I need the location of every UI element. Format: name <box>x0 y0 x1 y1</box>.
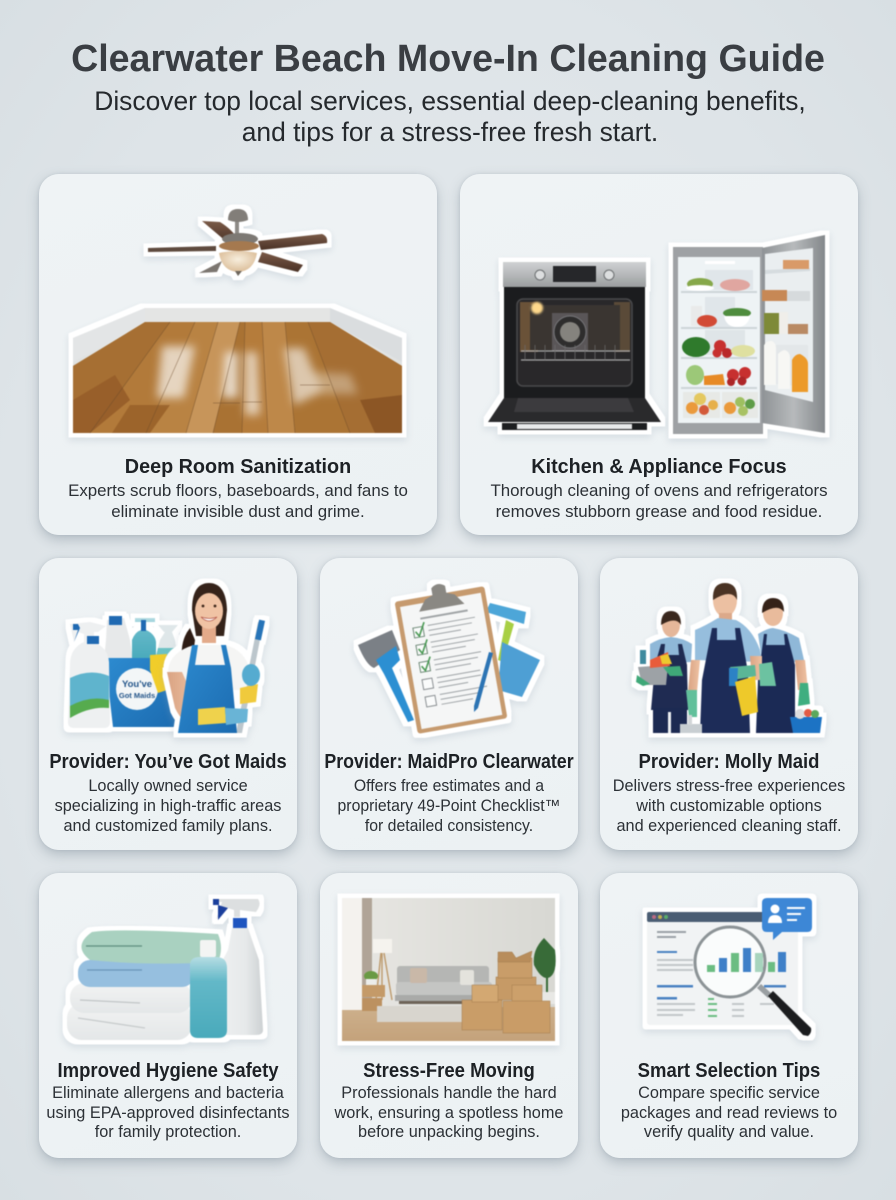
text block <box>68 481 408 521</box>
heading: Provider: Molly Maid <box>639 751 819 773</box>
sub-element: left cleaner <box>636 611 692 733</box>
sub-element: roller and sponge <box>486 603 540 697</box>
text block: proprietary 49-Point Checklist™ <box>338 797 560 815</box>
sub-element: bucket label: You've <box>122 679 152 690</box>
text block: Experts scrub floors, baseboards, and fans to <box>68 481 408 500</box>
sub-element: stacked boxes <box>462 951 550 1033</box>
icon: living room with moving boxes <box>342 898 556 1041</box>
icon: cleaning supplies bucket: Got Maids <box>119 691 155 700</box>
heading: Improved Hygiene Safety <box>57 1060 279 1082</box>
sub-element: right cleaner <box>756 598 822 733</box>
text block: and experienced cleaning staff. <box>616 817 842 835</box>
heading: Provider: You’ve Got Maids <box>49 751 287 773</box>
subtitle: Discover top local services, essential deep-cleaning benefits, <box>94 86 806 116</box>
text block: removes stubborn grease and food residue. <box>496 502 822 521</box>
text block: work, ensuring a spotless home <box>335 1104 563 1122</box>
sub-element: fridge food <box>682 278 758 418</box>
heading: Smart Selection Tips <box>638 1060 820 1082</box>
text block: verify quality and value. <box>644 1123 814 1141</box>
text block: Locally owned service <box>88 777 248 795</box>
text block: for detailed consistency. <box>365 817 533 835</box>
icon: open refrigerator <box>673 235 825 434</box>
icon: towels and bottles <box>67 899 263 1040</box>
text block <box>46 1084 290 1141</box>
text block: with customizable options <box>636 797 822 815</box>
title: Clearwater Beach Move-In Cleaning Guide <box>71 37 825 79</box>
text block <box>613 777 845 835</box>
icon: ceiling fan <box>148 209 327 276</box>
text block <box>338 777 560 835</box>
subtitle <box>94 86 806 147</box>
text block: using EPA-approved disinfectants <box>46 1104 290 1122</box>
text block: packages and read reviews to <box>621 1104 837 1122</box>
icon: maid with apron and mop <box>167 583 265 733</box>
panel: improved hygiene safety <box>39 873 297 1158</box>
panel: kitchen and appliance focus <box>460 174 858 535</box>
text block: Offers free estimates and a <box>354 777 544 795</box>
text block: for family protection. <box>95 1123 241 1141</box>
heading: Stress-Free Moving <box>363 1060 535 1082</box>
text block <box>490 481 828 521</box>
heading: Provider: MaidPro Clearwater <box>324 751 574 773</box>
text block: eliminate invisible dust and grime. <box>111 502 365 521</box>
text block: Compare specific service <box>638 1084 820 1102</box>
icon: review dashboard <box>647 898 812 1036</box>
icon: open oven <box>488 262 661 430</box>
text block <box>334 1084 563 1141</box>
text block: Professionals handle the hard <box>341 1084 557 1102</box>
subtitle: and tips for a stress-free fresh start. <box>242 117 658 147</box>
heading: Kitchen & Appliance Focus <box>531 455 787 478</box>
text block: Thorough cleaning of ovens and refrigerators <box>490 481 828 500</box>
sub-element: speech bubble <box>762 898 812 940</box>
text block: Eliminate allergens and bacteria <box>52 1084 284 1102</box>
sub-element: brush <box>358 630 414 722</box>
text block: before unpacking begins. <box>358 1123 540 1141</box>
text block <box>55 777 281 835</box>
sub-element: center cleaner <box>680 583 776 733</box>
heading: Deep Room Sanitization <box>125 455 351 478</box>
icon: checklist with cleaning tools <box>358 576 540 734</box>
panel: provider you've got maids <box>39 558 297 850</box>
icon: three cleaning staff <box>636 583 822 733</box>
text block: specializing in high-traffic areas <box>55 797 281 815</box>
icon: polished hardwood floor <box>73 308 402 433</box>
panel: provider molly maid <box>600 558 858 850</box>
panel: provider maidpro clearwater <box>320 558 578 850</box>
sub-element: magnifying glass <box>695 927 811 1036</box>
sub-element: folded towels <box>67 930 221 1040</box>
text block: and customized family plans. <box>63 817 273 835</box>
text block: Delivers stress-free experiences <box>613 777 845 795</box>
panel: smart selection tips <box>600 873 858 1158</box>
sub-element: teal bottle <box>190 940 227 1038</box>
sub-element: spray bottle <box>213 899 263 1035</box>
panel: stress-free moving <box>320 873 578 1158</box>
panel: deep room sanitization <box>39 174 437 535</box>
icon: cleaning supplies bucket <box>68 616 178 728</box>
text block <box>621 1084 837 1141</box>
